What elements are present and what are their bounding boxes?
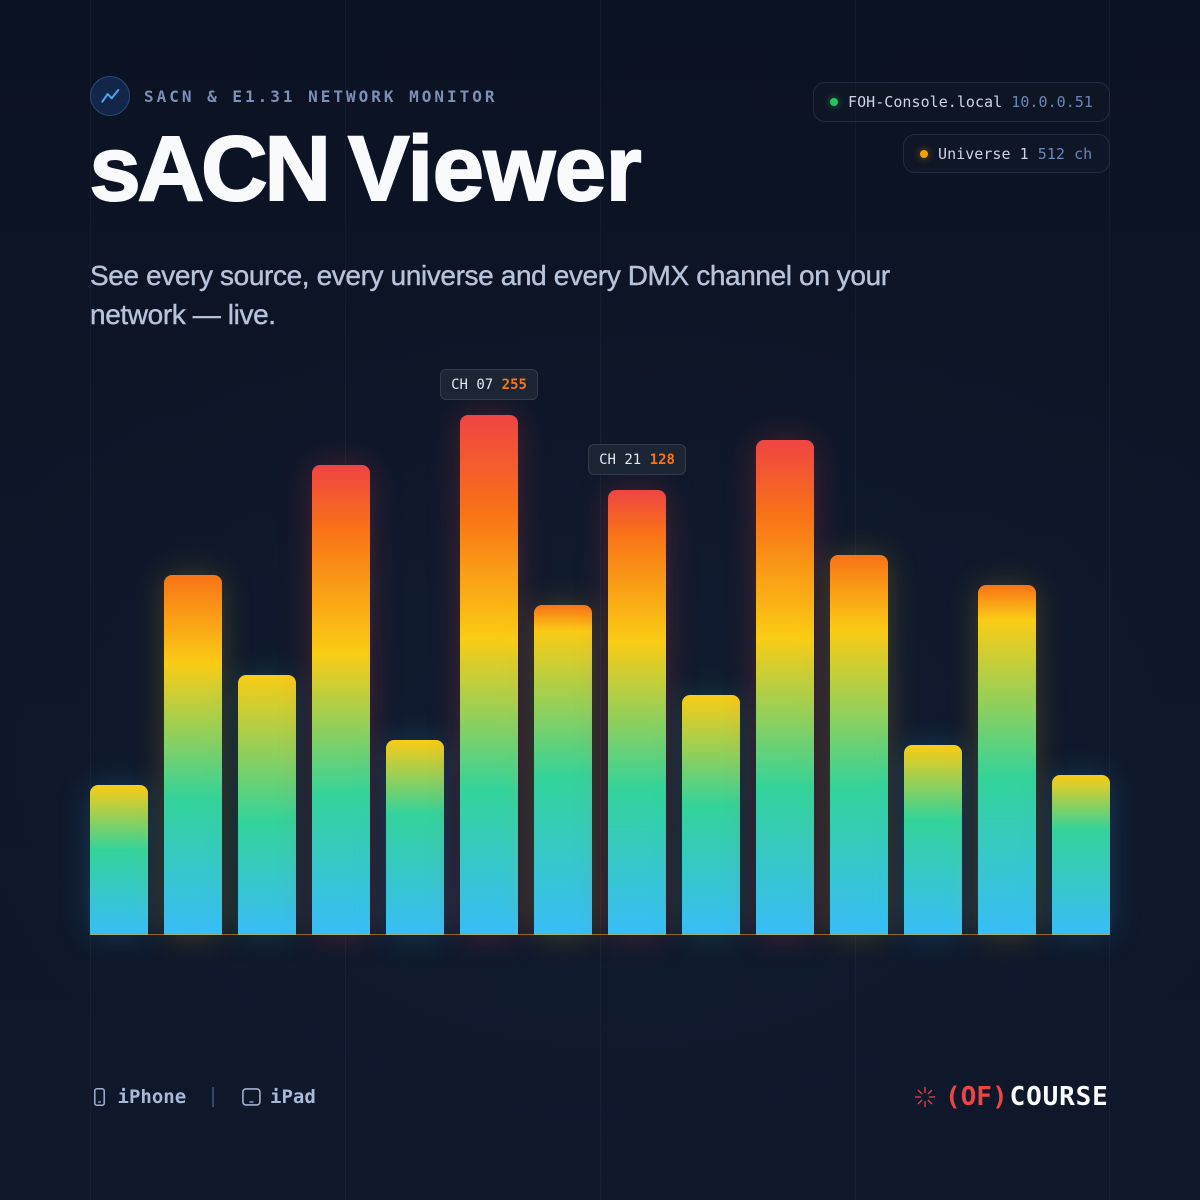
- chart baseline: [90, 934, 1110, 935]
- subtitle: See every source, every universe and every DMX channel on your: [90, 260, 890, 291]
- wordmark: (OF)COURSE: [945, 1082, 1109, 1112]
- eyebrow heading: SACN & E1.31 NETWORK MONITOR: [144, 87, 497, 106]
- callout: channel 21: CH 21 128: [599, 452, 675, 468]
- bar channel 3: [238, 675, 296, 935]
- bar channel 21: [608, 490, 666, 935]
- status pill: console host: [813, 82, 1110, 122]
- icon: tablet: [242, 1088, 261, 1106]
- bar channel 5: [386, 740, 444, 935]
- bar channel 7: [460, 415, 518, 935]
- bar channel 1: [90, 785, 148, 935]
- status pill: universe: [903, 134, 1110, 173]
- separator: [212, 1087, 214, 1107]
- status pill: universe: Universe 1 512 ch: [938, 145, 1092, 163]
- callout: channel 07: [440, 369, 538, 400]
- bar channel 22: [682, 695, 740, 935]
- bar channel 4: [312, 465, 370, 935]
- icon: phone: [94, 1088, 105, 1106]
- callout: channel 07: CH 07 255: [451, 377, 527, 393]
- bar channel 8: [534, 605, 592, 935]
- platform row: [94, 1086, 316, 1108]
- label: iPhone: iPhone: [118, 1086, 186, 1108]
- logo: [914, 1082, 1109, 1112]
- bar channel 2: [164, 575, 222, 935]
- label: iPad: iPad: [270, 1086, 316, 1108]
- bar channel 27: [1052, 775, 1110, 935]
- bar channel 25: [904, 745, 962, 935]
- subtitle: [90, 260, 890, 330]
- status pill: console host: FOH-Console.local 10.0.0.51: [848, 93, 1093, 111]
- callout: channel 21: [588, 444, 686, 475]
- bar channel 23: [756, 440, 814, 935]
- icon: activity line badge: [90, 76, 130, 116]
- title: sACN Viewer: [90, 118, 641, 220]
- bar channel 26: [978, 585, 1036, 935]
- icon: spark: [914, 1086, 936, 1108]
- bar channel 24: [830, 555, 888, 935]
- subtitle: network — live.: [90, 299, 276, 330]
